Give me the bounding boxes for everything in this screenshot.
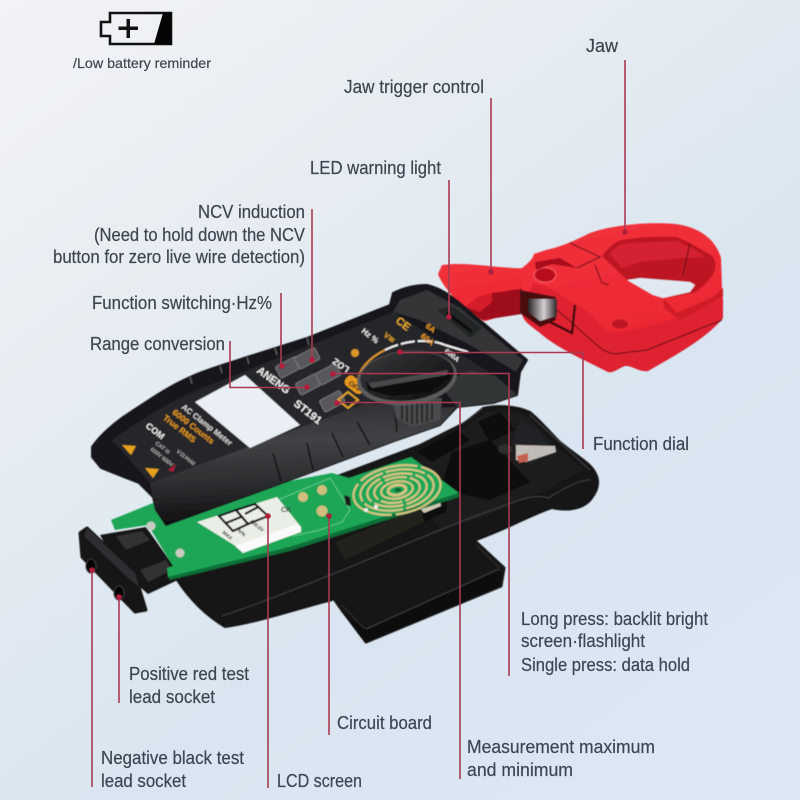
leader: NCV induction	[309, 209, 315, 363]
leader: negative socket	[89, 567, 95, 787]
LCD small labels	[221, 507, 291, 542]
label: measurement max and min	[467, 737, 655, 780]
meter description	[161, 398, 234, 463]
label: range conversion: Range conversion	[90, 334, 225, 354]
label: function switching: Function switching·Hz%	[92, 293, 272, 313]
label: negative socket	[101, 748, 244, 791]
jaw assembly	[438, 223, 723, 372]
LCD small labels: Hz%	[235, 527, 247, 539]
temperature icon	[351, 349, 359, 357]
circuit board	[111, 457, 459, 580]
jaw seams	[557, 243, 722, 354]
dial labels: 6A	[424, 321, 438, 335]
meter description: True RMS	[161, 413, 198, 445]
jaw inner wall	[602, 237, 715, 298]
label: negative socket: lead socket	[101, 771, 186, 791]
label: jaw trigger control: Jaw trigger control	[344, 77, 484, 97]
label: backlight and data hold: Long press: backlit bright	[521, 609, 708, 629]
dial labels: LOZ	[330, 356, 351, 375]
positive socket	[114, 586, 124, 600]
hold icon	[338, 392, 358, 408]
housing rim highlight	[222, 480, 590, 616]
dial handle	[366, 371, 450, 396]
leader: range conversion	[230, 341, 310, 390]
pivot hole	[534, 268, 556, 282]
dial labels: 60A	[419, 331, 436, 348]
COM label: COM	[144, 421, 166, 442]
small screw hole	[612, 320, 628, 328]
input ratings: 600V 600V	[149, 447, 174, 469]
dial labels: V≅	[382, 330, 397, 345]
top ridge notches	[190, 338, 309, 384]
leader: measurement max and min	[334, 400, 460, 779]
label: NCV induction: button for zero live wire detection)	[53, 247, 305, 267]
LCD small labels: CK	[281, 507, 291, 514]
cover lower bevel	[150, 403, 456, 525]
LCD small labels: MAX	[221, 530, 234, 542]
dial labels: CE	[393, 315, 413, 334]
dial scale	[358, 341, 468, 382]
leader: function dial	[397, 349, 583, 449]
LCD small labels: 600.0V	[249, 519, 265, 534]
upper cover	[92, 285, 527, 525]
label: NCV induction: (Need to hold down the NCV	[94, 225, 305, 245]
label: backlight and data hold: screen·flashlight	[521, 631, 645, 651]
icon: low battery	[101, 13, 171, 44]
label: NCV induction	[53, 202, 305, 267]
meter description: AC Clamp Meter	[180, 402, 234, 448]
leader: LED warning light	[446, 180, 452, 320]
label: circuit board: Circuit board	[337, 713, 432, 733]
roller	[520, 290, 556, 327]
label: measurement max and min: Measurement maximum	[467, 737, 655, 757]
label: NCV induction: NCV induction	[198, 202, 305, 222]
model name: ST191	[291, 398, 324, 427]
warning triangles	[122, 445, 159, 478]
leader: jaw trigger control	[488, 98, 494, 275]
leader: function switching	[279, 293, 285, 369]
LCD digits	[219, 504, 268, 531]
housing interior	[400, 410, 585, 530]
leader: jaw	[622, 60, 628, 235]
right side body	[440, 370, 517, 407]
label: positive socket: lead socket	[129, 687, 215, 707]
input ratings	[149, 441, 196, 469]
housing compartments	[417, 412, 530, 500]
brand text: ANENG	[254, 365, 292, 397]
leader: LCD screen	[265, 513, 271, 788]
leader: backlight and data hold	[330, 371, 509, 676]
function buttons	[275, 347, 345, 412]
jaw clamp head	[522, 223, 723, 372]
label: function dial: Function dial	[593, 434, 689, 454]
solder pads	[298, 492, 308, 502]
front panel	[112, 312, 497, 483]
touch ring pattern	[350, 459, 444, 521]
cover shell	[92, 285, 527, 525]
label: positive socket: Positive red test	[129, 664, 249, 684]
leader: circuit board	[326, 513, 332, 735]
label: LED warning light: LED warning light	[310, 158, 441, 178]
kickstand	[325, 542, 504, 642]
leader: positive socket	[116, 594, 122, 703]
dial labels: Hz %	[360, 326, 380, 345]
dial labels	[330, 315, 460, 375]
input ratings: V:Ω:Hold	[175, 449, 196, 467]
OFF indicator: OFF	[347, 380, 363, 395]
dial labels: 600A	[443, 348, 460, 364]
negative socket	[86, 559, 96, 573]
lower housing	[177, 406, 598, 627]
buzzer contact	[516, 445, 556, 462]
OFF indicator	[343, 373, 367, 396]
head cap	[393, 290, 523, 372]
label: measurement max and min: and minimum	[467, 760, 573, 780]
jaw trigger lever	[438, 264, 536, 321]
socket plate	[80, 528, 146, 612]
label: backlight and data hold	[521, 609, 708, 675]
socket cylinders	[100, 527, 182, 594]
label: negative socket: Negative black test	[101, 748, 244, 768]
label: backlight and data hold: Single press: data hold	[521, 655, 690, 675]
input ratings: CAT III	[154, 441, 171, 456]
caption: low battery reminder: /Low battery reminder	[73, 55, 211, 71]
dial knob	[354, 346, 460, 410]
LCD display module	[197, 497, 301, 550]
jaw lower band	[522, 283, 723, 372]
dial knob base	[392, 398, 442, 427]
label: jaw: Jaw	[586, 36, 619, 56]
test lead sockets	[80, 527, 182, 612]
label: LCD screen: LCD screen	[277, 771, 362, 791]
LCD window opening	[195, 375, 300, 448]
meter description: 6000 Counts	[170, 407, 217, 446]
board traces	[278, 478, 350, 536]
meter illustration	[80, 223, 723, 642]
label: positive socket	[129, 664, 249, 707]
jaw opening	[627, 278, 695, 298]
